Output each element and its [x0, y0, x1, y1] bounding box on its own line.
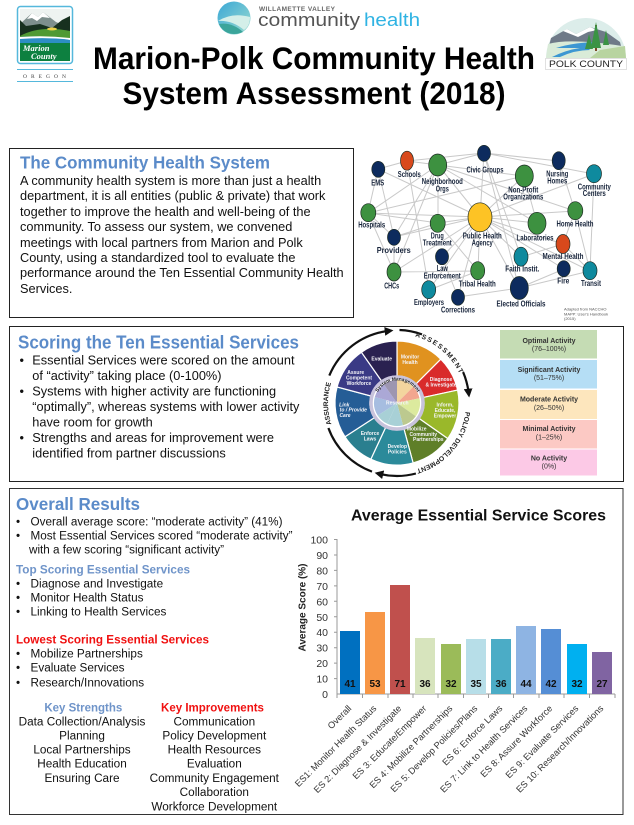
network labels: CHCs	[384, 280, 399, 290]
network labels: Corrections	[441, 305, 475, 315]
list: top scoring essential services: •	[16, 578, 20, 591]
network labels: Tribal Health	[459, 278, 496, 288]
list: top scoring essential services: Top Scoring Essential Services	[16, 563, 190, 577]
list: top scoring essential services: Monitor Health Status	[30, 592, 144, 605]
legend: activity levels: (0%)	[542, 464, 556, 470]
bar values: 32	[445, 679, 457, 690]
list: top scoring essential services	[16, 563, 190, 619]
list: lowest scoring essential services: •	[16, 677, 20, 690]
list: key strengths: Planning	[59, 730, 105, 743]
list: lowest scoring essential services	[16, 633, 209, 690]
network labels: Providers	[377, 245, 411, 255]
bar values	[344, 679, 608, 690]
cycle labels: ASSESSMENT	[415, 332, 464, 372]
text block: overall bullets	[16, 515, 293, 556]
logo: Marion County	[17, 6, 73, 82]
logo: Polk County	[546, 18, 626, 70]
list: top scoring essential services: Diagnose and Investigate	[30, 578, 164, 591]
network labels: Agency	[472, 237, 493, 247]
logo: Willamette Valley Community Health: community	[258, 10, 360, 30]
list: key improvements	[150, 703, 280, 813]
network labels: Civic Groups	[466, 165, 504, 175]
bar values: 35	[470, 679, 482, 690]
network labels: Centers	[583, 188, 606, 198]
y axis: 20	[316, 658, 328, 670]
text block: scoring bullets: •	[20, 430, 24, 445]
text block: system description: department, it is all entities (public & private) that work	[20, 188, 326, 203]
title	[93, 40, 535, 111]
text block: scoring bullets: •	[20, 353, 24, 368]
bar values: 41	[344, 679, 356, 690]
list: top scoring essential services: Linking to Health Services	[30, 606, 166, 619]
wheel: ten essential services	[323, 327, 472, 479]
logo: Willamette Valley Community Health: health	[364, 10, 420, 30]
x axis labels: ES 3: Educate/Empower	[351, 703, 428, 781]
x axis labels: ES 5: Develop Policies/Plans	[389, 703, 480, 794]
list: lowest scoring essential services: Research/Innovations	[30, 677, 144, 690]
logo: Willamette Valley Community Health	[218, 2, 420, 34]
text block: system description: community. To assess our system, we convened	[20, 219, 292, 234]
list: key improvements: Policy Development	[162, 730, 267, 743]
wheel labels: Policies	[388, 450, 407, 456]
bar chart: average essential service scores	[293, 508, 615, 795]
text block: system description	[20, 173, 344, 296]
list: key strengths: Local Partnerships	[33, 744, 131, 757]
x axis labels: ES 9: Evaluate Services	[504, 703, 581, 780]
text block: overall bullets: •	[16, 529, 20, 542]
wheel labels	[339, 354, 457, 456]
wheel labels: Health	[402, 360, 418, 366]
x axis labels: ES 8: Assure Workforce	[478, 703, 554, 779]
text block: overall bullets: Overall average score: “moderate activity” (41%)	[30, 515, 283, 528]
legend: activity levels: (1–25%)	[536, 434, 562, 442]
list: lowest scoring essential services: Mobilize Partnerships	[30, 648, 143, 661]
network labels: Nursing	[546, 168, 568, 178]
list: key strengths: Ensuring Care	[44, 772, 120, 785]
title: Marion-Polk Community Health	[93, 40, 535, 76]
wheel labels: Evaluate	[371, 356, 392, 362]
panel: The Community Health System	[10, 148, 354, 318]
list: key improvements: Communication	[173, 716, 255, 728]
text block: scoring bullets: Essential Services were scored on the amount	[32, 353, 295, 368]
network labels: Hospitals	[358, 220, 385, 230]
text block: overall bullets: Most Essential Services scored “moderate activity”	[30, 529, 293, 542]
list: lowest scoring essential services: Evaluate Services	[30, 662, 125, 675]
network labels: Home Health	[556, 219, 594, 229]
network labels: Elected Officials	[496, 298, 546, 308]
network source note: MAPP: User's Handbook	[564, 312, 608, 316]
x axis labels: ES 2: Diagnose & Investigate	[312, 703, 403, 795]
network diagram: community health system partners	[358, 145, 611, 321]
text block: scoring bullets: identified from partner discussions	[32, 446, 226, 460]
bar values: 53	[369, 679, 381, 690]
list: key improvements: Workforce Development	[151, 800, 278, 813]
legend: activity levels: (26–50%)	[534, 405, 564, 412]
list: key strengths: Key Strengths	[44, 703, 122, 715]
list: key strengths: Health Education	[37, 758, 127, 771]
y axis: 90	[316, 550, 328, 562]
bar values: 36	[495, 679, 507, 690]
wheel labels: Partnerships	[413, 437, 444, 443]
wheel labels: Laws	[364, 436, 376, 442]
wheel labels: Competent	[346, 376, 372, 382]
text block: scoring bullets	[20, 353, 300, 460]
list: lowest scoring essential services: •	[16, 648, 20, 661]
network labels	[358, 165, 611, 315]
legend: activity levels: Minimal Activity	[522, 426, 576, 433]
network source note: Adapted from NACCHO	[564, 306, 606, 312]
text block: system description: meetings with local partners from Marion and Polk	[20, 235, 303, 250]
wheel labels: Inform,	[437, 402, 454, 408]
logo: Marion County: County	[31, 51, 57, 61]
y axis: 60	[316, 596, 328, 608]
network labels: Fire	[557, 276, 570, 286]
list: key improvements: Health Resources	[168, 744, 261, 757]
text block: scoring bullets: Strengths and areas for improvement were	[32, 430, 274, 445]
logo: Willamette Valley Community Health: WILLAMETTE VALLEY	[259, 6, 336, 13]
list: key improvements: Community Engagement	[150, 772, 280, 785]
x axis labels: Overall	[326, 703, 353, 731]
text block: system description: performance around the Ten Essential Community Health	[20, 265, 344, 280]
wheel labels: Assure	[347, 370, 364, 376]
legend: activity levels: (76–100%)	[532, 346, 566, 353]
y axis: 100	[310, 534, 328, 546]
text block: scoring bullets: Systems with higher activity are functioning	[32, 384, 276, 399]
network labels: Enforcement	[424, 270, 461, 280]
legend: activity levels: No Activity	[531, 456, 567, 462]
legend: activity levels: Optimal Activity	[522, 338, 576, 345]
x axis labels: ES 4: Mobilize Partnerships	[368, 703, 455, 790]
y axis: 40	[316, 627, 328, 639]
text block: system description: A community health system is more than just a health	[20, 173, 321, 188]
bar values: 71	[394, 679, 406, 690]
list: key strengths	[19, 703, 145, 785]
network labels: Law	[437, 263, 448, 273]
list: key strengths: Data Collection/Analysis	[19, 716, 145, 728]
logo: Marion County: OREGON	[23, 74, 70, 80]
wheel labels: Workforce	[347, 381, 372, 387]
wheel labels: Develop	[388, 444, 407, 450]
network labels: Transit	[581, 278, 601, 288]
legend: activity levels: Moderate Activity	[520, 396, 578, 404]
network source note: (2015)	[564, 316, 576, 321]
bar values: 42	[545, 679, 557, 690]
y axis title: Average Score (%)	[296, 564, 308, 652]
chart title: Average Essential Service Scores	[351, 508, 606, 525]
list: key improvements: Evaluation	[187, 758, 242, 771]
network labels: Community	[578, 182, 611, 192]
logo: Polk County: POLK COUNTY	[549, 59, 624, 70]
heading: community health system: The Community Health System	[20, 152, 270, 172]
network labels: Mental Health	[542, 251, 584, 261]
network labels: Employers	[414, 297, 444, 307]
network labels: Laboratories	[516, 232, 554, 242]
wheel labels: Care	[339, 413, 351, 419]
legend: activity levels	[500, 330, 597, 476]
title: System Assessment (2018)	[122, 75, 506, 111]
y axis: 10	[316, 674, 328, 686]
cycle arrows	[328, 330, 468, 476]
text block: overall bullets: with a few scoring “significant activity”	[28, 543, 224, 556]
network labels: Faith Instit.	[505, 263, 539, 273]
wheel labels: Community	[410, 432, 437, 438]
network labels: Orgs	[436, 183, 449, 193]
legend: activity levels: (51–75%)	[534, 375, 564, 382]
x axis labels: ES 7: Link to Health Services	[438, 703, 530, 795]
cycle labels: ASSURANCE	[323, 382, 332, 424]
wheel centre arc label: System Management	[376, 377, 420, 392]
heading: overall results: Overall Results	[16, 494, 140, 514]
list: key improvements: Collaboration	[180, 786, 249, 799]
wheel labels: Empower	[434, 414, 456, 420]
text block: scoring bullets: of “activity” taking place (0-100%)	[32, 368, 222, 383]
y axis: 30	[316, 642, 328, 654]
network labels: Neighborhood	[422, 176, 463, 186]
list: lowest scoring essential services: •	[16, 662, 20, 675]
bar values: 44	[520, 679, 532, 690]
x axis labels: ES 6: Enforce Laws	[440, 703, 505, 767]
network labels: EMS	[371, 177, 385, 187]
list: lowest scoring essential services: Lowest Scoring Essential Services	[16, 633, 209, 647]
logo: Marion County: Marion	[22, 43, 50, 53]
y axis	[310, 534, 615, 701]
list: top scoring essential services: •	[16, 606, 20, 619]
list: top scoring essential services: •	[16, 592, 20, 605]
wheel labels: Link	[339, 402, 350, 408]
network labels: Organizations	[503, 192, 544, 202]
wheel labels: to / Provide	[340, 408, 367, 414]
text block: overall bullets: •	[16, 515, 20, 528]
wheel labels: Enforce	[361, 431, 380, 437]
y axis: 50	[316, 612, 328, 624]
bar values: 36	[419, 679, 431, 690]
y axis: 70	[316, 581, 328, 593]
network labels: Non-Profit	[508, 185, 538, 195]
heading: scoring: Scoring the Ten Essential Services	[18, 333, 299, 353]
text block: system description: together to improve the health and well-being of the	[20, 204, 311, 219]
y axis: 80	[316, 566, 328, 578]
y axis: 0	[322, 689, 328, 701]
wheel labels: Monitor	[401, 354, 419, 360]
network labels: Schools	[398, 169, 421, 179]
wheel labels: Mobilize	[407, 426, 427, 432]
text block: scoring bullets: •	[20, 384, 24, 399]
network labels: Treatment	[423, 237, 452, 247]
text block: scoring bullets: have room for growth	[32, 415, 153, 430]
text block: system description: County, using a standardized tool to evaluate the	[20, 250, 296, 265]
wheel labels: & Investigate	[425, 382, 457, 388]
panel: Scoring the Ten Essential Services	[9, 326, 624, 482]
wheel labels: Research	[386, 400, 409, 406]
panel: Overall Results	[10, 488, 623, 814]
x axis labels: ES1: Monitor Health Status	[293, 703, 379, 789]
x axis labels	[293, 703, 606, 795]
bars	[340, 585, 612, 694]
x axis labels: ES 10: Research/Innovations	[514, 703, 606, 795]
network labels: Drug	[431, 230, 444, 240]
wheel labels: Educate,	[435, 408, 456, 414]
bar values: 32	[571, 679, 583, 690]
network labels: Homes	[547, 175, 568, 185]
text block: scoring bullets: “optimally”, whereas systems with lower activity	[32, 399, 300, 414]
text block: system description: Services.	[20, 281, 72, 296]
bar values: 27	[596, 679, 608, 690]
list: key improvements: Key Improvements	[161, 703, 264, 715]
legend: activity levels: Significant Activity	[518, 367, 580, 374]
network nodes	[361, 145, 602, 305]
cycle labels: POLICY DEVELOPMENT	[418, 412, 470, 474]
wheel labels: Diagnose	[430, 377, 452, 383]
network labels: Public Health	[463, 230, 502, 240]
cycle labels	[323, 332, 470, 474]
network source note	[564, 306, 608, 321]
